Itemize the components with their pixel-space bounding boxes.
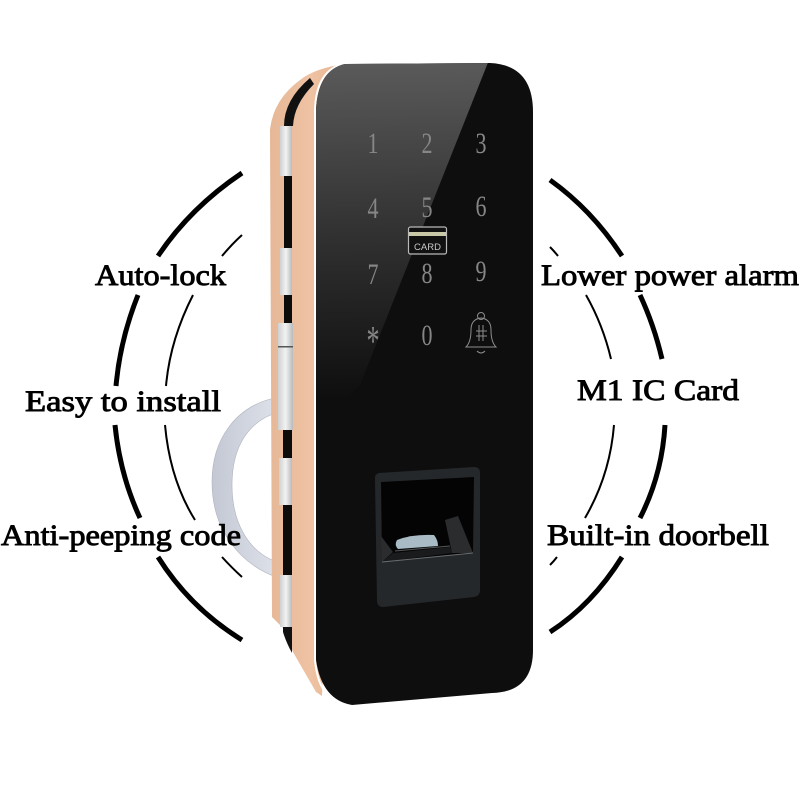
- keypad digits: 8: [422, 257, 432, 290]
- keypad digits: 6: [476, 190, 486, 223]
- keypad digits: 2: [422, 127, 432, 160]
- glass glare: [316, 63, 488, 362]
- label: Auto-lock: Auto-lock: [95, 259, 226, 292]
- keypad digits: 7: [368, 258, 378, 291]
- lock device: [270, 60, 533, 705]
- label: Built-in doorbell: Built-in doorbell: [547, 519, 769, 552]
- right decorative arcs: [550, 180, 665, 632]
- keypad digits: *: [366, 319, 380, 365]
- label: Anti-peeping code: Anti-peeping code: [1, 519, 241, 552]
- label: Easy to install: Easy to install: [25, 385, 221, 418]
- icon: card reader: [408, 227, 446, 254]
- label: Lower power alarm: Lower power alarm: [541, 259, 799, 292]
- left decorative arcs: [115, 173, 242, 640]
- keypad digits: 4: [368, 192, 378, 225]
- fingerprint scanner: [375, 467, 480, 607]
- label: M1 IC Card: M1 IC Card: [577, 374, 739, 407]
- keypad digits: 9: [476, 255, 486, 288]
- keypad digits: 3: [476, 127, 486, 160]
- gold side body: [270, 64, 345, 696]
- black front panel: [316, 63, 533, 705]
- white panel edge: [315, 64, 342, 704]
- door handle ring: [212, 397, 279, 578]
- icon: card reader: CARD: [414, 242, 441, 253]
- hinge strip: [278, 78, 314, 653]
- icon: doorbell: [466, 312, 496, 353]
- keypad digits: [366, 127, 486, 365]
- keypad digits: 1: [368, 127, 378, 160]
- keypad digits: 0: [422, 319, 432, 352]
- keypad digits: 5: [422, 191, 432, 224]
